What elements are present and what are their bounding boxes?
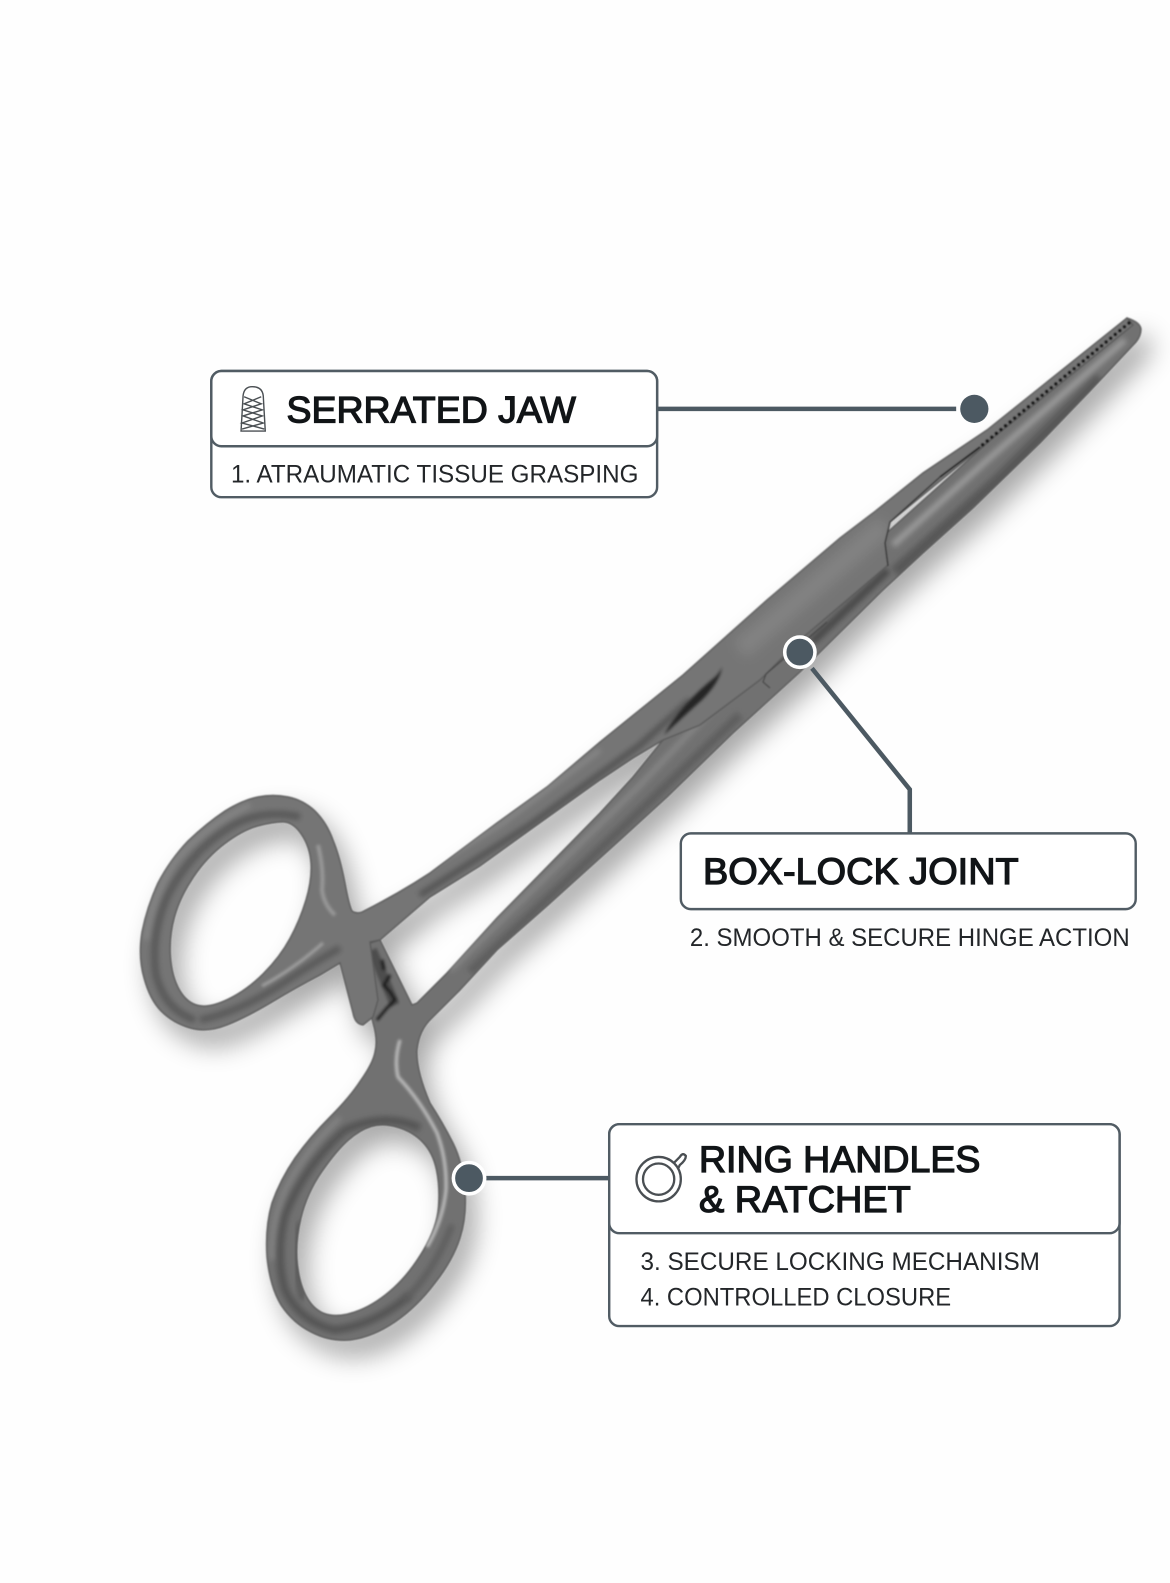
- icon: ring handle: [636, 1154, 686, 1201]
- leader line: [812, 668, 910, 834]
- upper blade, arm and ring handle: [140, 318, 1133, 1030]
- feature text: 2. SMOOTH & SECURE HINGE ACTION: [690, 925, 1130, 952]
- heading: RING HANDLES: [699, 1139, 980, 1180]
- forceps illustration: [140, 318, 1141, 1340]
- lower blade, arm and ring handle: [267, 318, 1141, 1340]
- heading: SERRATED JAW: [286, 389, 576, 431]
- leader line: [658, 407, 956, 411]
- slit between the arms: [664, 667, 722, 735]
- feature text 3: 3. SECURE LOCKING MECHANISM: [640, 1249, 1040, 1276]
- panel outline: [609, 1124, 1120, 1326]
- panel outline: [211, 371, 657, 497]
- callout: box-lock joint: [681, 637, 1136, 952]
- callout: serrated jaw: [211, 371, 988, 497]
- lower part shading: [272, 340, 1125, 1330]
- marker dot: [453, 1163, 485, 1194]
- leader line: [486, 1176, 609, 1180]
- heading second line: & RATCHET: [699, 1179, 911, 1220]
- feature text 4: 4. CONTROLLED CLOSURE: [640, 1284, 951, 1311]
- heading: BOX-LOCK JOINT: [703, 851, 1019, 892]
- marker dot: [785, 637, 815, 667]
- ratchet teeth: [377, 960, 395, 1020]
- jaw lines and serrations: [763, 323, 1129, 688]
- header outline: [609, 1124, 1120, 1233]
- icon: serrated jaw: [241, 387, 265, 431]
- header outline: [211, 371, 657, 446]
- panel outline: [681, 833, 1136, 909]
- upper part shading: [146, 525, 885, 1020]
- callout: ring handles and ratchet: [453, 1124, 1120, 1326]
- marker dot: [960, 395, 988, 423]
- feature text: 1. ATRAUMATIC TISSUE GRASPING: [231, 462, 638, 489]
